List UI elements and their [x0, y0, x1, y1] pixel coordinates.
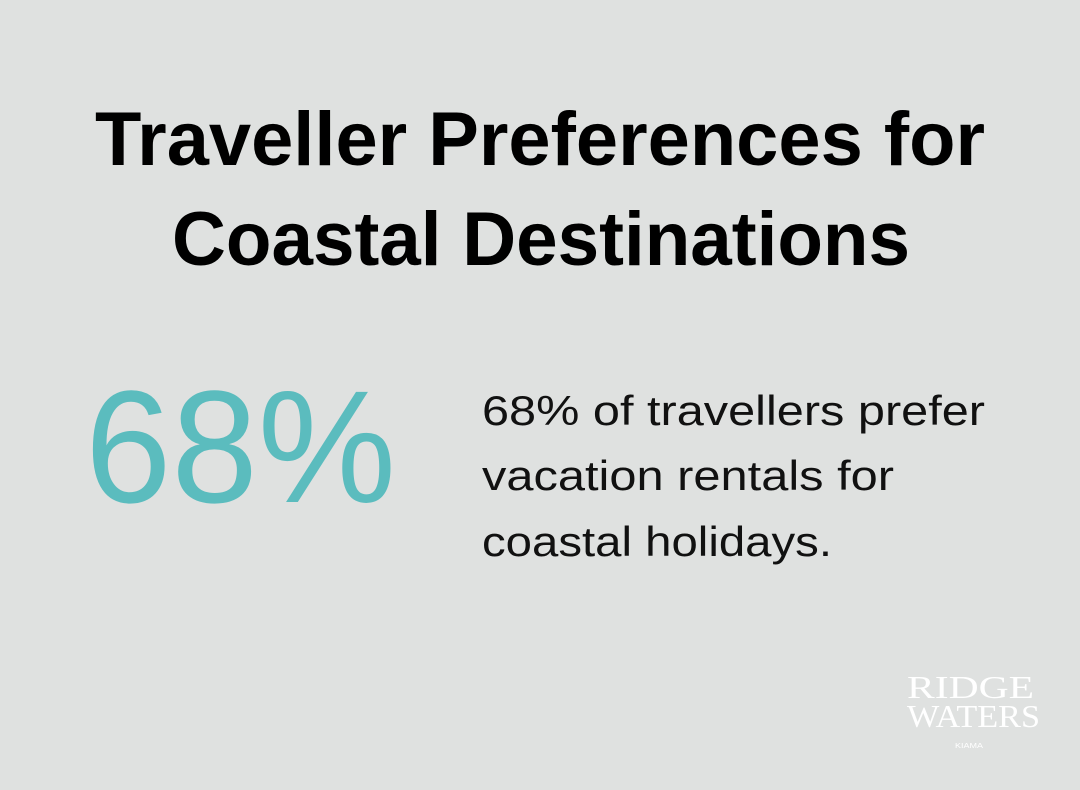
big stat: 68%: 68%	[85, 357, 396, 536]
stat description: 68% of travellers prefer	[482, 387, 985, 434]
title: Traveller Preferences for	[95, 97, 985, 182]
stat description: vacation rentals for	[482, 452, 894, 499]
logo: Ridge Waters Kiama: RIDGE	[907, 669, 1034, 705]
title: Coastal Destinations	[172, 197, 910, 282]
stat description: coastal holidays.	[482, 518, 832, 565]
title	[95, 97, 985, 282]
stat description	[482, 387, 985, 565]
logo: Ridge Waters Kiama	[907, 669, 1040, 750]
logo: Ridge Waters Kiama: KIAMA	[955, 743, 983, 750]
logo: Ridge Waters Kiama: WATERS	[907, 698, 1040, 734]
